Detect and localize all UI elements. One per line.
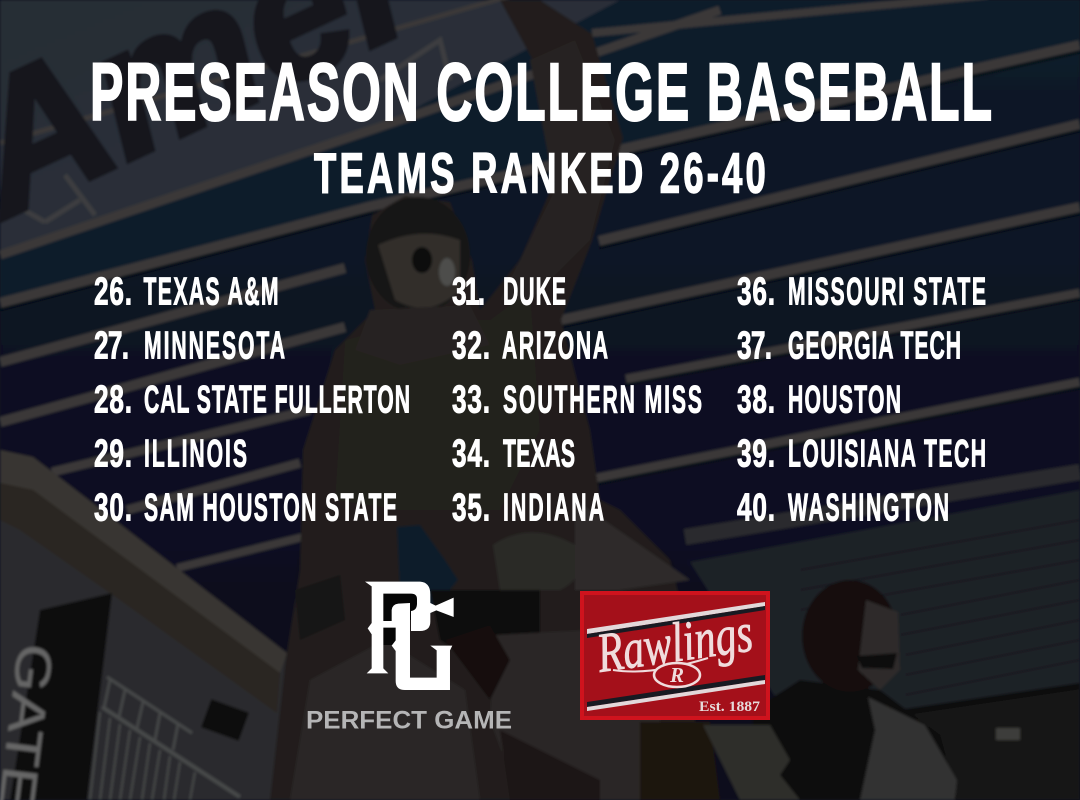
established date: Est. 1887 <box>699 699 761 715</box>
rank 31: DUKE <box>503 270 566 313</box>
lower group <box>493 532 580 590</box>
R oval: R <box>669 663 684 687</box>
wordmark: Rawlings <box>592 602 756 685</box>
rank 32: 32. <box>452 323 490 367</box>
title: PRESEASON COLLEGE BASEBALL <box>90 48 992 138</box>
rank 40: WASHINGTON <box>788 486 949 529</box>
rank 30: SAM HOUSTON STATE <box>144 486 397 529</box>
rank 39: 39. <box>737 431 775 475</box>
statue right figure <box>750 680 958 800</box>
rank 35: 35. <box>452 485 490 529</box>
logo: Perfect Game <box>306 582 512 734</box>
truss <box>15 40 450 222</box>
rank 27: MINNESOTA <box>144 324 285 367</box>
rank 39: LOUISIANA TECH <box>788 432 986 475</box>
subtitle: TEAMS RANKED 26-40 <box>314 142 766 206</box>
patch stripes <box>587 602 765 711</box>
logo: Rawlings patch <box>580 591 770 720</box>
rank 30: 30. <box>94 485 132 529</box>
rank 36: MISSOURI STATE <box>788 270 986 313</box>
rank 29 <box>94 431 247 475</box>
rank 34: TEXAS <box>503 432 575 475</box>
rank 34: 34. <box>452 431 490 475</box>
rank 26: 26. <box>94 269 132 313</box>
louvre wall lower right <box>690 490 1080 720</box>
rankings column 2 <box>452 269 702 529</box>
collar <box>355 305 490 365</box>
rank 32: ARIZONA <box>502 324 608 367</box>
rank 40: 40. <box>737 485 775 529</box>
rank 27: 27. <box>94 323 129 367</box>
fence <box>90 677 240 800</box>
arm <box>500 40 615 300</box>
rank 31 <box>452 269 566 313</box>
rank 36: 36. <box>737 269 775 313</box>
head <box>366 197 470 313</box>
torso <box>335 290 540 510</box>
rank 38 <box>737 377 901 421</box>
rank 29: 29. <box>94 431 132 475</box>
gate sign <box>10 593 112 800</box>
rankings column 3 <box>737 269 986 529</box>
blue sliver between legs <box>397 525 458 625</box>
rank 37: 37. <box>737 323 772 367</box>
rank 31: 31. <box>452 269 485 313</box>
canopy lower left <box>0 450 287 800</box>
rank 29: ILLINOIS <box>144 432 247 475</box>
rank 28: CAL STATE FULLERTON <box>144 378 410 421</box>
rank 35: INDIANA <box>503 486 604 529</box>
rank 28: 28. <box>94 377 132 421</box>
rank 38: HOUSTON <box>788 378 901 421</box>
icon: PG monogram <box>365 582 454 690</box>
rank 38: 38. <box>737 377 775 421</box>
rank 34 <box>452 431 575 475</box>
statue main figure <box>270 0 700 800</box>
R oval <box>654 663 700 687</box>
rank 37: GEORGIA TECH <box>788 324 961 367</box>
rankings column 1 <box>94 269 410 529</box>
swash <box>613 658 708 672</box>
rank 26: TEXAS A&M <box>144 270 279 313</box>
wordmark: PERFECT GAME <box>306 706 512 734</box>
rank 32 <box>452 323 608 367</box>
rank 33: SOUTHERN MISS <box>503 378 702 421</box>
rank 35 <box>452 485 604 529</box>
rank 33: 33. <box>452 377 490 421</box>
